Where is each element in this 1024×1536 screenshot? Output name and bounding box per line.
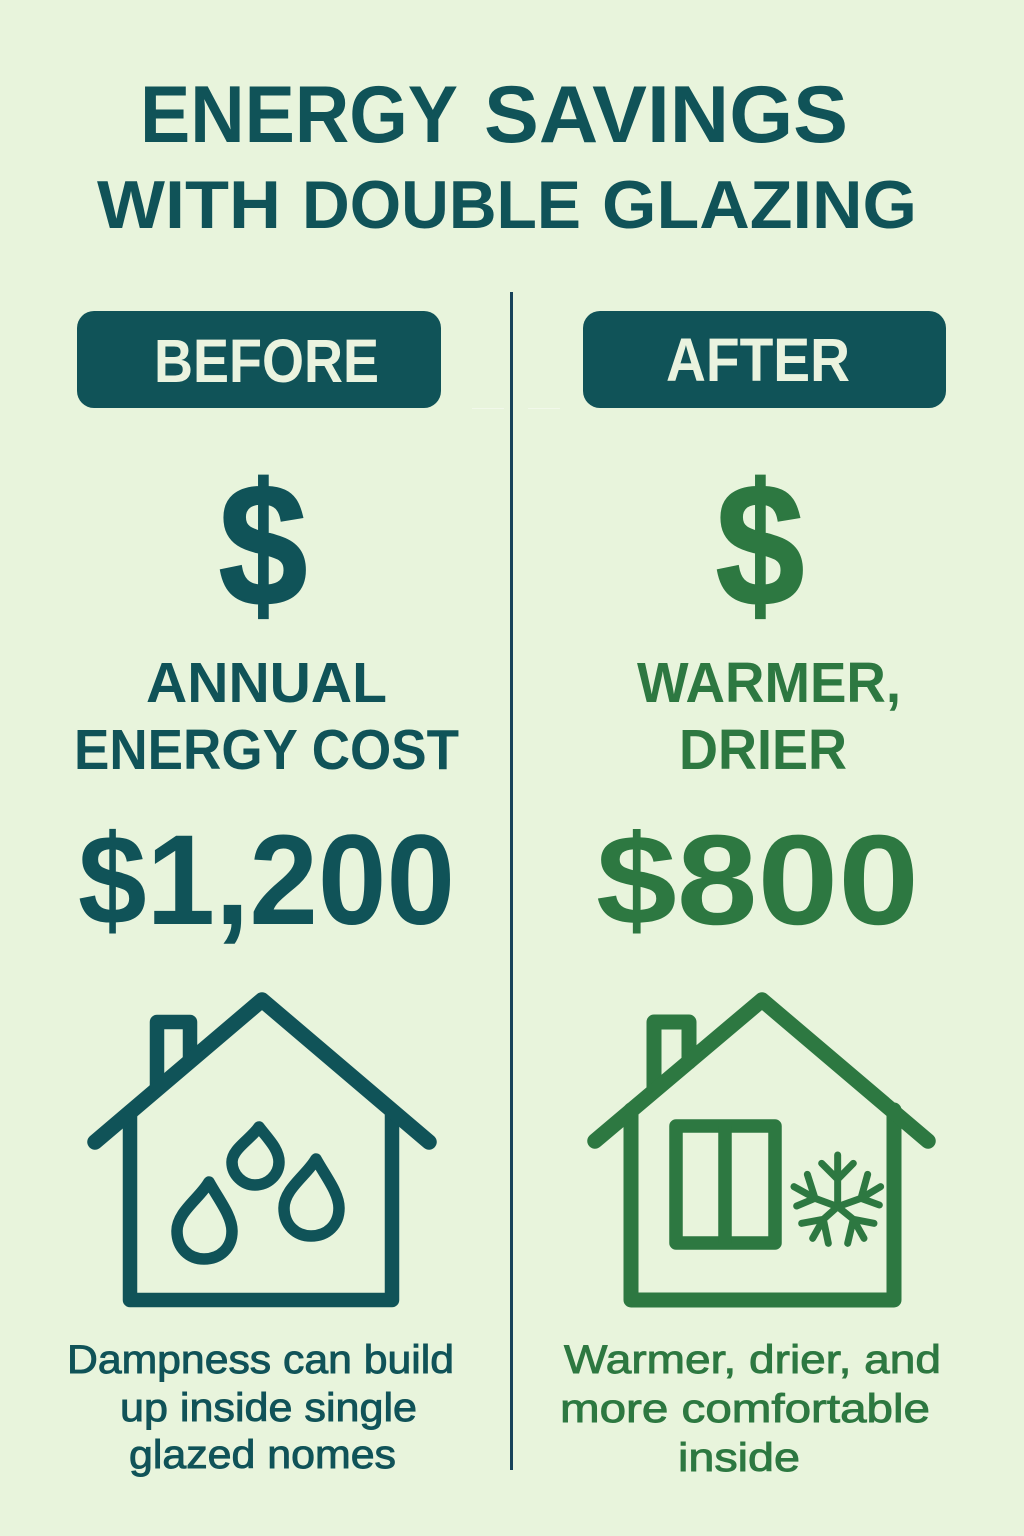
caption: after: Warmer, drier, and	[564, 1338, 941, 1382]
value: after cost: $800	[596, 809, 919, 952]
caption: before: glazed nomes	[129, 1433, 396, 1477]
panel: after	[560, 311, 946, 1480]
badge: before: BEFORE	[154, 327, 379, 395]
badge: after	[583, 311, 946, 408]
window	[676, 1126, 775, 1243]
icon: dollar sign: $	[716, 447, 804, 642]
icon: house with water drops	[95, 1000, 429, 1300]
caption: after: more comfortable	[560, 1387, 930, 1431]
heading: annual energy cost: ENERGY COST	[74, 718, 459, 782]
title line 1: ENERGY	[140, 70, 458, 160]
title line 1: SAVINGS	[484, 70, 848, 160]
title line 2: DOUBLE	[302, 167, 581, 243]
icon: dollar sign: $	[219, 447, 307, 642]
heading: warmer, drier: DRIER	[679, 718, 847, 782]
caption: after	[560, 1338, 941, 1480]
snowflake	[794, 1155, 881, 1243]
icon: house with window and snowflake	[595, 1000, 928, 1300]
title	[97, 70, 917, 243]
water drops	[177, 1127, 339, 1259]
center divider	[510, 292, 513, 1470]
title line 2: WITH	[97, 167, 281, 243]
caption: after: inside	[678, 1436, 800, 1480]
heading: annual energy cost: ANNUAL	[146, 651, 387, 715]
title line 1	[140, 70, 848, 160]
panel: before	[67, 311, 459, 1477]
title line 2: GLAZING	[602, 167, 917, 243]
badge: before	[77, 311, 441, 408]
caption: before	[67, 1338, 454, 1477]
heading: annual energy cost	[74, 651, 459, 782]
caption: before: up inside single	[120, 1386, 417, 1430]
heading: warmer, drier	[637, 651, 901, 782]
value: before cost: $1,200	[78, 809, 455, 952]
badge: after: AFTER	[666, 326, 850, 394]
caption: before: Dampness can build	[67, 1338, 454, 1382]
heading: warmer, drier: WARMER,	[637, 651, 901, 715]
title line 2	[97, 167, 917, 243]
